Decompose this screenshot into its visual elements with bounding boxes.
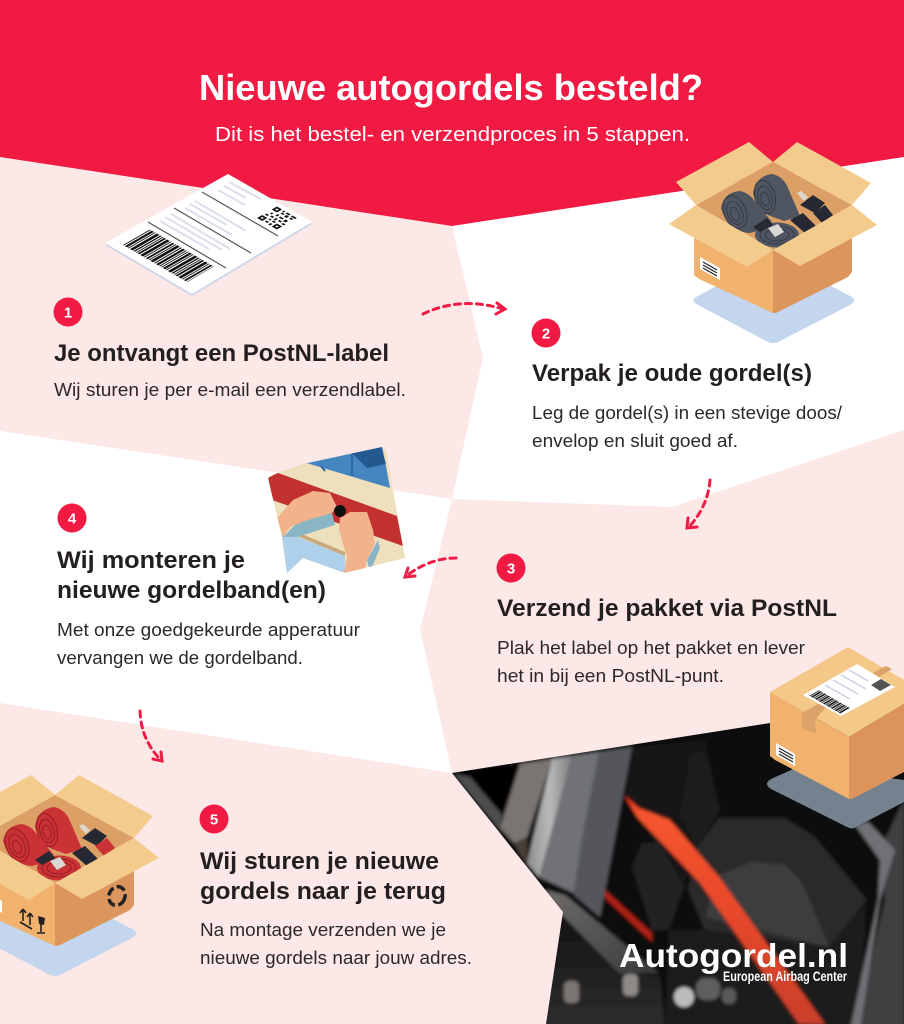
body 4: Met onze goedgekeurde apperatuur bbox=[57, 620, 360, 640]
number badge 1: 1 bbox=[64, 304, 72, 322]
icon: closed parcel with label bbox=[767, 647, 904, 828]
step 5 text bbox=[200, 804, 472, 968]
step 1 text bbox=[54, 298, 406, 400]
shipping label bbox=[803, 664, 895, 716]
logo: Autogordel.nl: European Airbag Center bbox=[723, 968, 847, 984]
heading 5 bbox=[200, 848, 446, 905]
number badge 1 bbox=[54, 298, 82, 326]
icon: shipping label document bbox=[105, 174, 312, 296]
heading 3: Verzend je pakket via PostNL bbox=[497, 595, 837, 622]
body 5: nieuwe gordels naar jouw adres. bbox=[200, 948, 472, 968]
heading 2: Verpak je oude gordel(s) bbox=[532, 360, 812, 387]
arrow: step 1 to step 2 bbox=[423, 303, 505, 314]
body 3 bbox=[497, 638, 805, 686]
heading 5: Wij sturen je nieuwe bbox=[200, 848, 439, 875]
step 4 text bbox=[57, 504, 360, 668]
panel: step 5 background bbox=[0, 703, 563, 1024]
box sticker bbox=[776, 743, 795, 766]
step 2 text bbox=[532, 318, 842, 451]
body 5 bbox=[200, 920, 472, 968]
panel: header background bbox=[0, 0, 904, 226]
heading 5: gordels naar je terug bbox=[200, 878, 446, 905]
body 4 bbox=[57, 620, 360, 668]
number badge 3: 3 bbox=[507, 560, 515, 578]
tape bbox=[802, 666, 892, 733]
icon: open box with grey belts bbox=[669, 142, 877, 343]
number badge 4 bbox=[58, 504, 86, 532]
shadow bbox=[767, 766, 904, 828]
number badge 2 bbox=[532, 318, 560, 348]
body 3: het in bij een PostNL-punt. bbox=[497, 666, 724, 686]
body 1: Wij sturen je per e-mail een verzendlabel. bbox=[54, 380, 406, 400]
body 5: Na montage verzenden we je bbox=[200, 920, 446, 940]
panel: step 1 background bbox=[0, 150, 483, 499]
panel: step 4 background bbox=[0, 431, 452, 773]
number badge 2: 2 bbox=[542, 326, 550, 342]
number badge 4: 4 bbox=[68, 510, 77, 528]
box faces bbox=[770, 647, 904, 737]
number badge 5: 5 bbox=[210, 812, 218, 828]
title: Nieuwe autogordels besteld? bbox=[199, 67, 703, 108]
heading 4: nieuwe gordelband(en) bbox=[57, 577, 326, 604]
heading 4 bbox=[57, 547, 326, 604]
arrow: step 4 to step 5 bbox=[140, 711, 162, 761]
panel: step 2 background bbox=[452, 157, 904, 507]
number badge 5 bbox=[200, 804, 228, 834]
arrow: step 2 to step 3 bbox=[687, 480, 710, 528]
step 3 text bbox=[496, 554, 837, 686]
panel: step 3 background bbox=[420, 430, 904, 773]
icon: open box with red belts bbox=[0, 775, 159, 976]
logo: Autogordel.nl: Autogordel.nl bbox=[619, 937, 848, 974]
arrow: step 3 to step 4 bbox=[405, 558, 456, 577]
recycling mark bbox=[106, 884, 128, 908]
subtitle: Dit is het bestel- en verzendproces in 5 stappen. bbox=[215, 124, 690, 146]
body 3: Plak het label op het pakket en lever bbox=[497, 638, 805, 658]
number badge 3 bbox=[496, 554, 526, 582]
photo: car seat with red seat belt bbox=[440, 690, 904, 1024]
body 2 bbox=[532, 403, 842, 451]
heading 1: Je ontvangt een PostNL-label bbox=[54, 340, 389, 367]
handling marks bbox=[20, 909, 45, 933]
body 2: Leg de gordel(s) in een stevige doos/ bbox=[532, 403, 842, 423]
icon: hands mounting a belt bbox=[268, 447, 405, 573]
heading 4: Wij monteren je bbox=[57, 547, 245, 574]
body 2: envelop en sluit goed af. bbox=[532, 431, 738, 451]
body 4: vervangen we de gordelband. bbox=[57, 648, 303, 668]
